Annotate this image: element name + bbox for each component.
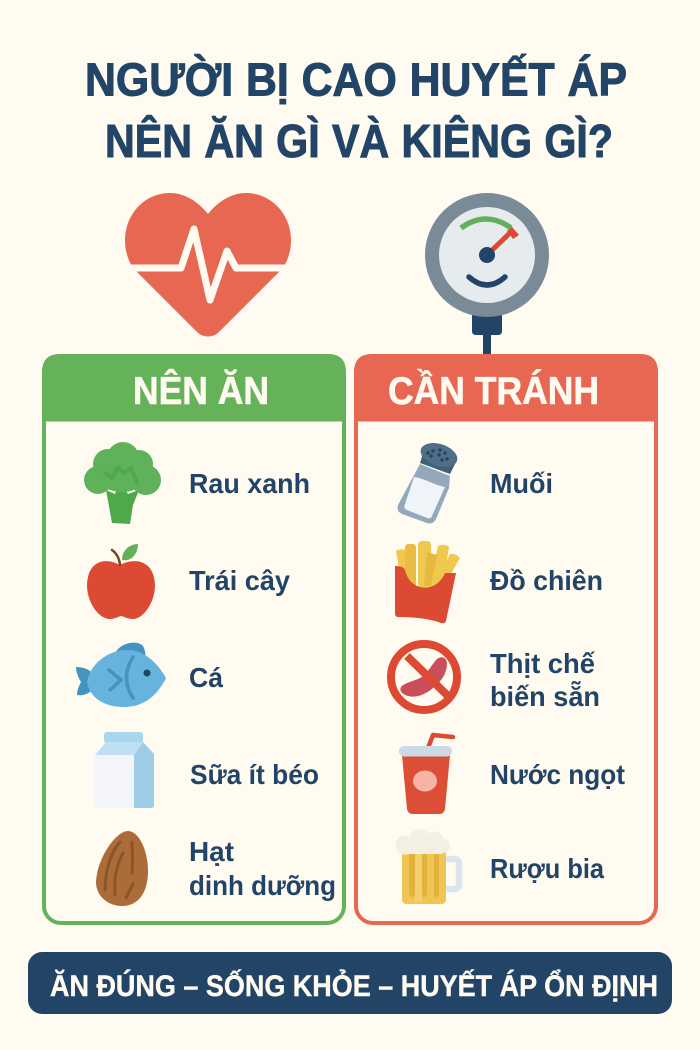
icon: blood pressure gauge [425, 193, 549, 354]
item: nước ngọt [399, 735, 625, 814]
icon: apple [87, 544, 155, 619]
panel: nên ăn [42, 354, 346, 923]
item: rượu bia [396, 829, 604, 904]
icon: heart with pulse [125, 193, 291, 336]
icon: french fries [395, 541, 460, 623]
item: đồ chiên [395, 541, 603, 623]
item: sữa ít béo: Sữa ít béo [190, 759, 319, 790]
icon: soda cup [399, 735, 453, 814]
item: thịt chế biến sẵn: Thịt chế [490, 648, 595, 679]
item: sữa ít béo [94, 732, 319, 808]
item: thịt chế biến sẵn: biến sẵn [490, 680, 600, 712]
header: cần tránh [354, 354, 658, 422]
item: muối [398, 439, 553, 524]
title: NÊN ĂN GÌ VÀ KIÊNG GÌ? [105, 115, 613, 167]
icon: almond [96, 831, 148, 906]
header: nên ăn: NÊN ĂN [133, 369, 269, 413]
item: muối: Muối [490, 468, 553, 499]
icon: beer mug [396, 829, 459, 904]
item: rau xanh [84, 442, 310, 524]
item: cá [76, 643, 223, 707]
title [85, 54, 627, 167]
item: nước ngọt: Nước ngọt [490, 759, 625, 790]
item: rượu bia: Rượu bia [490, 853, 604, 884]
item: trái cây [87, 544, 290, 619]
icon: broccoli [84, 442, 161, 524]
icon: no processed meat [391, 644, 457, 710]
icon: fish [76, 643, 166, 707]
item: cá: Cá [189, 662, 223, 693]
icon: salt shaker [398, 439, 460, 524]
title: NGƯỜI BỊ CAO HUYẾT ÁP [85, 54, 627, 106]
item: hạt dinh dưỡng: Hạt [189, 836, 234, 867]
item: trái cây: Trái cây [189, 565, 290, 596]
footer banner [28, 952, 672, 1014]
panel: cần tránh [354, 354, 658, 923]
item: hạt dinh dưỡng: dinh dưỡng [189, 870, 336, 901]
item: hạt dinh dưỡng [96, 831, 336, 906]
icon: milk carton [94, 732, 154, 808]
header: cần tránh: CẦN TRÁNH [388, 369, 599, 413]
item: thịt chế biến sẵn [391, 644, 600, 712]
item: rau xanh: Rau xanh [189, 468, 310, 499]
header: nên ăn [42, 354, 346, 422]
item: đồ chiên: Đồ chiên [490, 565, 603, 596]
